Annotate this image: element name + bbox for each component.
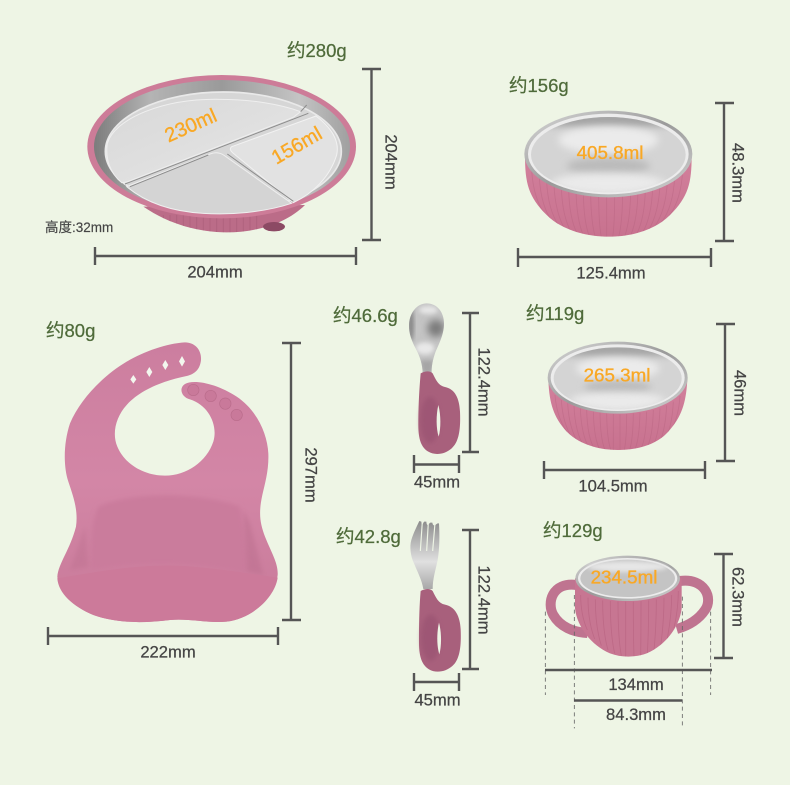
spoon illustration [408, 303, 460, 454]
capacity label: 156ml: 156ml [268, 123, 326, 169]
cup illustration [545, 556, 711, 728]
dimension: small bowl width: 104.5mm [578, 476, 648, 496]
dimension: bib width [48, 627, 278, 662]
panel: divided plate [45, 40, 400, 282]
capacity label: 405.8ml: 405.8ml [577, 142, 643, 163]
dimension: spoon width: 45mm [414, 472, 460, 492]
dimension: large bowl width [518, 248, 711, 282]
plate illustration [87, 75, 356, 232]
dimension: spoon length: 122.4mm [474, 347, 494, 417]
dimension: cup rim width [574, 700, 682, 724]
weight label: bib: 约80g [46, 320, 95, 341]
weight label: spoon: 约46.6g [333, 305, 398, 326]
dimension: large bowl height: 48.3mm [728, 143, 748, 203]
dimension: small bowl width [544, 461, 705, 496]
snap buttons [188, 384, 242, 421]
weight label: large bowl: 约156g [509, 75, 569, 96]
panel: fork [336, 521, 494, 710]
capacity label: 230ml: 230ml [162, 105, 220, 147]
dimension: large bowl width: 125.4mm [576, 264, 646, 282]
dimension: plate height [362, 69, 400, 240]
dimension: cup height: 62.3mm [728, 567, 748, 627]
panel: small bowl [526, 303, 750, 496]
dimension: fork width: 45mm [414, 690, 461, 710]
weight label: fork: 约42.8g [336, 526, 401, 547]
weight label: cup: 约129g [543, 520, 603, 541]
large bowl illustration [524, 111, 692, 238]
dimension: fork width [414, 673, 461, 710]
bib illustration [57, 342, 278, 622]
dimension: cup width with handles: 134mm [608, 675, 664, 694]
weight label: plate: 约280g [287, 40, 347, 61]
height note: 高度:32mm [45, 219, 113, 235]
dimension: plate width [95, 247, 356, 282]
panel: spoon [333, 303, 494, 492]
compartment: lower [127, 153, 292, 214]
dimension: cup rim width: 84.3mm [606, 705, 666, 724]
dimension: plate width: 204mm [187, 262, 243, 282]
dimension: small bowl height [716, 324, 750, 461]
panel: two-handled cup [543, 520, 748, 728]
capacity label: 265.3ml: 265.3ml [584, 364, 650, 386]
capacity label: 234.5ml: 234.5ml [591, 566, 657, 588]
dimension: cup height [714, 554, 748, 658]
panel: large bowl [509, 75, 748, 282]
dimension: small bowl height: 46mm [730, 370, 750, 416]
panel: bib [46, 320, 320, 662]
dimension: bib width: 222mm [140, 642, 196, 662]
dimension: fork length [462, 530, 494, 669]
dimension: fork length: 122.4mm [474, 565, 494, 635]
dimension: large bowl height [715, 103, 748, 241]
measure guides [545, 595, 711, 728]
dimension: bib height [282, 343, 320, 620]
cup handles [551, 581, 708, 633]
weight label: small bowl: 约119g [526, 303, 584, 324]
dimension: plate height: 204mm [382, 134, 400, 190]
compartment: 156ml [230, 116, 337, 203]
suction tab [263, 222, 285, 231]
strap holes [130, 356, 185, 384]
dimension: bib height: 297mm [302, 447, 320, 503]
dimension: spoon length [462, 313, 494, 452]
fork illustration [410, 521, 461, 672]
dimension: spoon width [414, 455, 460, 492]
small bowl illustration [548, 342, 688, 451]
compartment: 230ml [107, 99, 301, 183]
